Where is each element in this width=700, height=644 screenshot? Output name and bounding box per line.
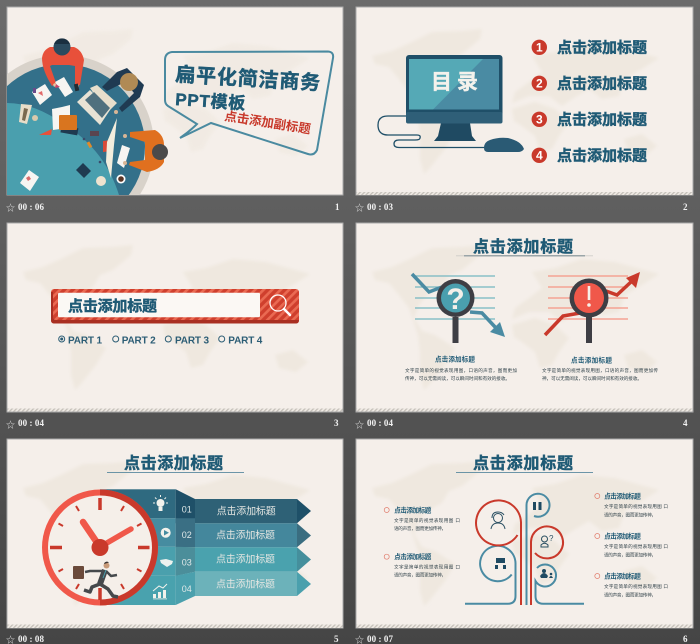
part options [59,336,263,346]
panel: slide 6 tree [356,439,693,628]
clock [42,490,158,606]
person: navy suit [102,68,144,114]
footer: slide 1: 1 [335,202,340,212]
part options: PART 2 [122,336,156,346]
search bar [51,289,299,324]
item labels: 点击添加标题 [216,578,275,590]
list: contents items: 点击添加标题 [557,38,647,56]
list: contents items: 1 [536,40,543,54]
list: contents items: 点击添加标题 [557,110,647,128]
icon: people [540,569,553,578]
bubble subtitle: 点击添加副标题 [224,108,312,137]
footer: slide 2: 2 [683,202,688,212]
text block: left: 点击添加标题 [435,354,475,364]
footer: slide 1 [6,202,340,213]
icon: handshake [160,559,173,567]
illustration: meeting table from above [7,38,168,195]
icon: computer monitor [378,55,524,152]
item labels: 点击添加标题 [217,504,276,518]
text block: left 1: 文字是简单的视觉表现用图 口 [394,517,460,524]
item numbers: 01 [182,504,192,514]
text block: right 2: 文字是简单的视觉表现用图 口 [604,543,668,550]
panel: slide 2 contents [356,7,693,195]
footer: slide 4 [355,418,688,430]
text block: right 3: 点击添加标题 [604,571,641,580]
footer: slide 2: ☆ [355,203,364,213]
item numbers: 04 [182,584,192,594]
person: orange shirt [123,130,168,172]
footer: slide 6 [355,634,688,644]
text block: left 1: 点击添加标题 [394,505,432,514]
footer: slide 2 [355,202,688,213]
item numbers [182,504,192,594]
chart: falling trend magnifier: ? [446,283,465,316]
footer: slide 4: 00 : 04 [367,418,394,428]
icon: mouse [484,138,524,152]
icon: org chart [495,558,506,569]
list: contents items: 4 [536,148,543,162]
search bar title: 点击添加标题 [68,297,157,315]
footer: slide 4: ☆ [355,420,364,430]
icon: light bulb [153,495,168,511]
text block: right 1: 点击添加标题 [604,491,641,500]
text block: right 3 [595,571,668,598]
text block: left 2: 文字是简单的视觉表现用图 口 [394,564,460,570]
item labels: 点击添加标题 [216,528,275,542]
text block: right 3: 文字是简单的视觉表现用图 口 [604,583,668,590]
clock ticks [50,498,150,600]
text block: left 2 [384,552,460,578]
chair and notes [106,118,130,178]
text block: right [542,356,658,382]
icon: support agent [491,512,505,529]
panel: slide 1 cover [6,6,344,196]
part options: PART 4 [228,336,263,346]
panel: slide 4 question and alert [356,223,693,412]
list: contents items: 2 [536,76,543,90]
footer: slide 2: 00 : 03 [367,202,394,212]
footer: slide 5: 5 [334,634,339,644]
tree diagram [465,494,584,605]
part options: PART 3 [175,336,209,346]
part options: PART 1 [68,336,102,346]
list: contents items: 3 [536,112,543,126]
chart: falling trend magnifier [412,274,505,343]
text block: left 1 [384,505,460,532]
text block: right 2: 语的声音，图而更加传神， [604,552,656,558]
text block: left: 文字是简单的视觉表现用图，口语的声音，图而更加 [405,367,517,374]
text block: left 2: 语的声音，图而更加传神， [394,572,446,578]
clock hands [83,522,131,547]
footer: slide 5 [6,634,339,644]
footer: slide 3: 3 [334,418,339,428]
footer: slide 5: 00 : 08 [18,634,44,644]
footer: slide 6: 00 : 07 [367,634,394,644]
chart: rising trend magnifier [545,272,640,343]
list: contents items [532,38,647,164]
text block: right: 文字是简单的视觉表现用图，口语的声音，图而更加传 [542,367,658,374]
footer: slide 3: ☆ [6,420,15,430]
text block: left 1: 语的声音，图而更加传神， [394,525,446,532]
list: contents items: 点击添加标题 [557,74,647,92]
text block: left [405,354,517,382]
footer: slide 1: ☆ [6,203,15,213]
slide heading: 点击添加标题 [473,237,573,256]
monitor label: 目录 [431,71,478,94]
footer: slide 6: 6 [683,634,688,644]
icon: magnifier [270,295,290,315]
item labels: 点击添加标题 [216,552,275,566]
text block: right 1 [595,491,668,518]
item numbers: 03 [182,558,192,568]
icon: person with question [541,534,554,547]
panel: slide 5 clock [7,439,343,628]
icon: growth chart [153,584,167,599]
text block: right: 点击添加标题 [571,356,612,364]
text block: left: 传神，可以无需阅读，可以瞬间时间和有效的接收。 [405,375,510,382]
icon: play [161,528,171,538]
footer: slide 1: 00 : 06 [18,202,44,212]
documents and objects on table [19,77,126,191]
slide heading: 点击添加标题 [473,454,573,472]
text block: right 1: 文字是简单的视觉表现用图 口 [604,503,668,510]
speech bubble [165,52,333,154]
bubble title line 2: PPT模板 [175,90,246,113]
bubble title line 1: 扁平化简洁商务 [175,63,321,95]
text block: right: 神，可以无需阅读，可以瞬间时间和有效的接收。 [542,375,642,382]
text block: right 3: 语的声音，图而更加传神， [604,592,656,598]
running businessman [73,562,118,597]
text block: right 1: 语的声音，图而更加传神， [604,512,656,518]
slide heading: 点击添加标题 [124,454,223,472]
icon: binoculars [533,502,542,510]
person: red shirt [42,38,84,88]
footer: slide 3: 00 : 04 [18,418,44,428]
item labels [216,504,276,590]
list: contents items: 点击添加标题 [557,146,647,164]
panel: slide 3 section [7,223,343,412]
folded ribbon list [100,489,311,605]
icon: person with question: ? [549,534,554,543]
text block: left 2: 点击添加标题 [394,552,432,561]
footer: slide 3 [6,418,339,430]
footer: slide 4: 4 [683,418,688,428]
item numbers: 02 [182,530,192,540]
laptop [77,85,117,125]
text block: right 2 [595,531,668,558]
text block: right 2: 点击添加标题 [604,531,641,540]
